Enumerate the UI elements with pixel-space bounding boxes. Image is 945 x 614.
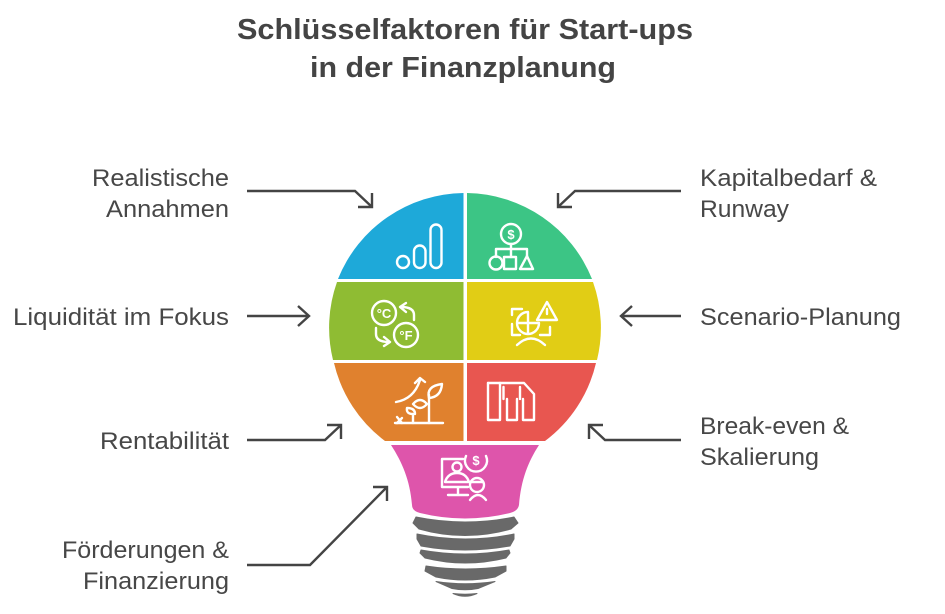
label: Rentabilität: Rentabilität xyxy=(100,428,229,455)
segment: magenta xyxy=(391,445,539,518)
arrow: Realistische Annahmen xyxy=(247,191,372,207)
segment: orange xyxy=(334,363,464,441)
icon: bar signal xyxy=(397,224,442,268)
icon: org chart with dollar xyxy=(490,224,533,270)
arrow: Förderungen & Finanzierung xyxy=(247,487,387,565)
arrow: Kapitalbedarf & Runway xyxy=(558,191,681,207)
label: Break-even & Skalierung xyxy=(700,413,849,471)
arrow: Break-even & Skalierung xyxy=(589,425,681,440)
light bulb xyxy=(329,193,601,596)
label: Liquidität im Fokus: Liquidität im Fokus xyxy=(13,304,229,331)
icon: advisor with money xyxy=(442,453,487,500)
arrow: Rentabilität xyxy=(247,425,341,440)
segment: lime xyxy=(329,282,464,360)
label: Realistische Annahmen xyxy=(92,165,229,223)
label: Break-even & Skalierung: Skalierung xyxy=(700,444,819,471)
icon: growing plant xyxy=(395,378,443,423)
label: Förderungen & Finanzierung xyxy=(62,537,229,595)
icon: currency exchange xyxy=(372,301,418,347)
icon: org chart with dollar: $ xyxy=(507,227,515,242)
icon: currency exchange: °C xyxy=(377,306,392,321)
label: Kapitalbedarf & Runway: Runway xyxy=(700,196,789,223)
title: in der Finanzplanung xyxy=(310,52,616,84)
icon: currency exchange: °F xyxy=(399,328,413,343)
label: Scenario-Planung: Scenario-Planung xyxy=(700,304,901,331)
segment: red xyxy=(467,363,596,441)
icon: binders xyxy=(488,383,534,420)
label: Break-even & Skalierung: Break-even & xyxy=(700,413,849,440)
label: Kapitalbedarf & Runway xyxy=(700,165,877,223)
label: Förderungen & Finanzierung: Förderungen & xyxy=(62,537,229,564)
segment: green xyxy=(467,193,592,279)
icon: advisor with money: $ xyxy=(472,453,480,468)
segment: yellow xyxy=(467,282,601,360)
label: Förderungen & Finanzierung: Finanzierung xyxy=(83,568,229,595)
title xyxy=(237,14,693,84)
label: Realistische Annahmen: Realistische xyxy=(92,165,229,192)
bulb screw base xyxy=(413,517,518,596)
arrow: Liquidität im Fokus xyxy=(247,306,309,326)
label: Kapitalbedarf & Runway: Kapitalbedarf & xyxy=(700,165,877,192)
segment: blue xyxy=(338,193,464,279)
arrow: Scenario-Planung xyxy=(621,306,681,326)
icon: risk scenario xyxy=(512,302,557,345)
label: Realistische Annahmen: Annahmen xyxy=(106,196,229,223)
title: Schlüsselfaktoren für Start-ups xyxy=(237,14,693,46)
